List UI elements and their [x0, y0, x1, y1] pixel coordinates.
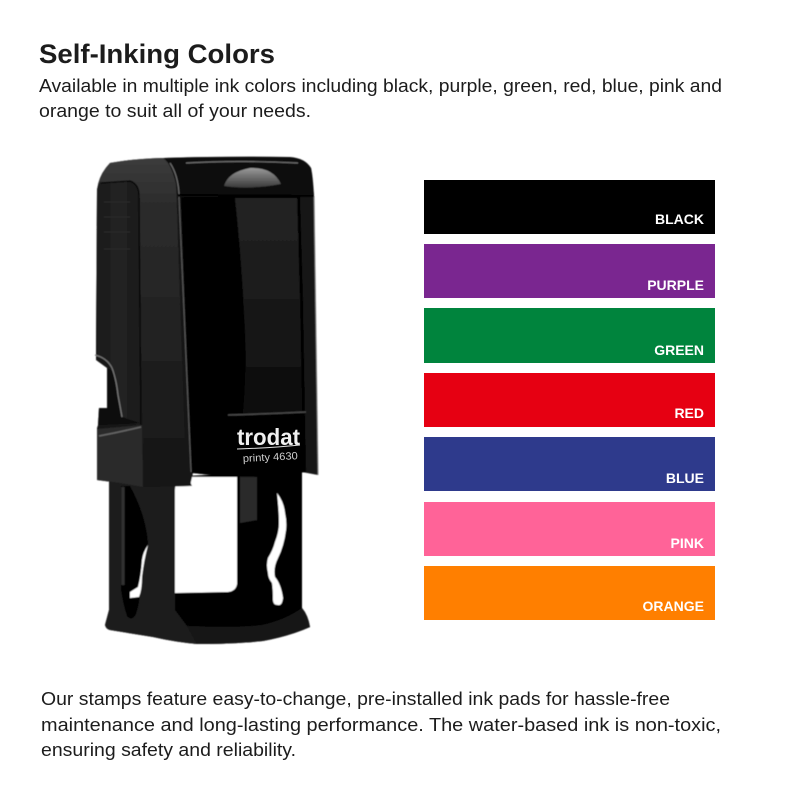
swatch: blue: BLUE [666, 470, 704, 486]
stamp right cut-out [267, 493, 286, 605]
closing text: Our stamps feature easy-to-change, pre-installed ink pads for hassle-free [41, 689, 670, 709]
stamp cap highlight [224, 168, 281, 188]
stamp product image [95, 157, 318, 644]
intro text: orange to suit all of your needs. [39, 101, 311, 121]
swatch: pink: PINK [671, 535, 704, 551]
stamp base and legs [105, 470, 310, 644]
swatch: purple: PURPLE [647, 277, 704, 293]
stamp cap seam [178, 195, 314, 196]
closing text [41, 689, 721, 760]
stamp shoulder [98, 158, 192, 487]
swatch: black: BLACK [655, 211, 704, 227]
swatch: red: RED [674, 405, 704, 421]
stamp inner mechanism [240, 477, 257, 523]
stamp brand: trodat [237, 424, 300, 450]
stamp side seam [100, 181, 141, 427]
stamp edge highlight [179, 197, 191, 472]
stamp right edge [314, 196, 318, 475]
stamp left leg [105, 480, 197, 644]
stamp window [175, 477, 237, 593]
closing text: maintenance and long-lasting performance. The water-based ink is non-toxic, [41, 715, 721, 735]
stamp slot lever edge [122, 487, 124, 585]
swatch: purple [424, 244, 715, 298]
stamp grip lines [104, 202, 130, 249]
closing text: ensuring safety and reliability. [41, 740, 296, 760]
swatch: red [424, 373, 715, 427]
swatch: blue [424, 437, 715, 491]
stamp clip highlight [99, 427, 141, 436]
stamp clip [97, 425, 143, 487]
stamp brand rule [237, 445, 300, 449]
stamp notch highlight [95, 355, 122, 417]
swatch: orange: ORANGE [643, 598, 704, 614]
stamp side panel [96, 181, 141, 427]
stamp notch inner [98, 368, 140, 425]
stamp cap line [170, 162, 298, 194]
swatch: black [424, 180, 715, 234]
stamp model: printy 4630 [243, 450, 298, 465]
stamp base rim [187, 608, 310, 644]
stamp top cap [165, 157, 314, 196]
swatch: green: GREEN [654, 342, 704, 358]
intro text [39, 76, 722, 121]
swatch: green [424, 308, 715, 363]
stamp upper body [96, 157, 318, 487]
stamp left cut-out [130, 545, 148, 598]
stamp front panel [181, 196, 306, 476]
intro text: Available in multiple ink colors including black, purple, green, red, blue, pink and [39, 76, 722, 96]
swatch: pink [424, 502, 715, 556]
title: Self-Inking Colors [39, 39, 275, 69]
stamp front reflection [235, 198, 302, 414]
stamp left slot [121, 486, 148, 619]
swatch: orange [424, 566, 715, 620]
stamp label divider [228, 412, 306, 415]
